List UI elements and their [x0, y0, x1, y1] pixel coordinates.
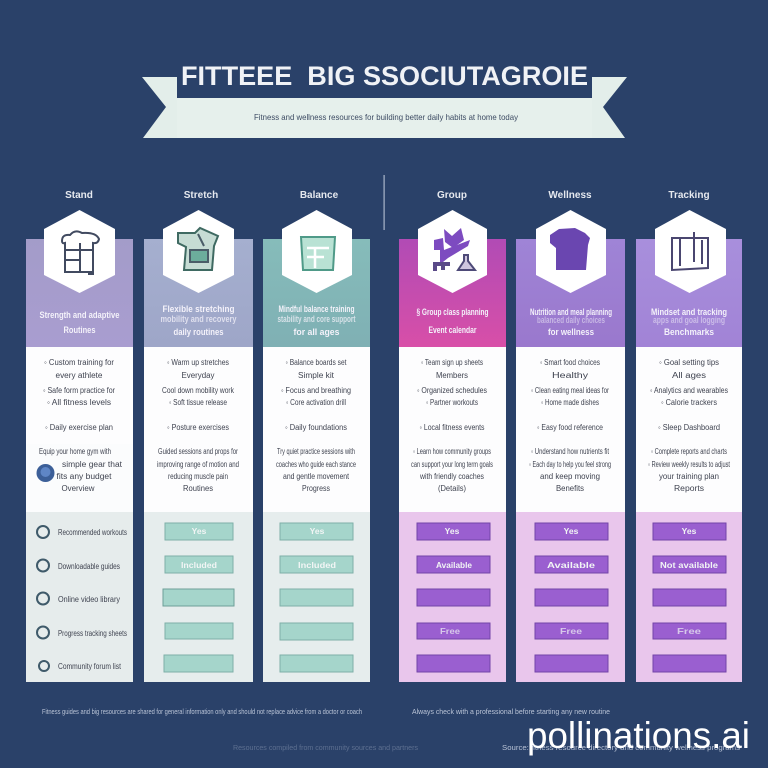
list text: ◦ All fitness levels [47, 398, 111, 407]
resource bars: Yes [310, 526, 325, 536]
resource bars: Free [440, 626, 460, 636]
list text: ◦ Calorie trackers [661, 398, 717, 407]
paragraph [529, 447, 611, 493]
paragraph [276, 447, 356, 493]
paragraph: (Details) [438, 484, 466, 493]
icon: hexagon outline chart [655, 210, 726, 293]
paragraph: can support your long term goals [411, 460, 493, 469]
list text: ◦ Posture exercises [167, 423, 229, 432]
header text: Flexible stretching [162, 304, 234, 314]
resource bars: Not available [660, 560, 718, 570]
resource rows: Progress tracking sheets [58, 629, 127, 638]
paragraph: coaches who guide each stance [276, 460, 356, 469]
list text: ◦ Safe form practice for [43, 386, 115, 395]
panel: column 6 [636, 210, 742, 682]
paragraph with badge: simple gear that [62, 460, 123, 469]
panel: column 4 [399, 210, 506, 682]
panel: column 5 [516, 210, 625, 682]
paragraph: ◦ Complete reports and charts [651, 447, 727, 456]
resource bars: Included [298, 560, 336, 570]
list text: ◦ Organized schedules [417, 386, 487, 395]
list text: Healthy [552, 371, 588, 380]
paragraph [648, 447, 731, 493]
resource rows: Online video library [58, 595, 120, 604]
center divider [384, 175, 385, 230]
paragraph: Try quiet practice sessions with [277, 447, 355, 456]
list text: Simple kit [298, 371, 335, 380]
list text: every athlete [56, 371, 103, 380]
list text: ◦ Home made dishes [541, 398, 599, 407]
paragraph with badge: fits any budget [56, 472, 112, 481]
list text: ◦ Daily foundations [285, 423, 347, 432]
resource rows: Community forum list [58, 662, 122, 671]
watermark: pollinations.ai [527, 715, 750, 756]
panel: column 1 [26, 210, 133, 682]
paragraph: Benefits [556, 484, 584, 493]
list text [531, 358, 609, 432]
resource bars [653, 523, 726, 672]
paragraph: ◦ Each day to help you feel strong [529, 460, 611, 469]
list text: ◦ Sleep Dashboard [658, 423, 720, 432]
resource bars: Yes [445, 526, 460, 536]
paragraph: reducing muscle pain [168, 472, 228, 481]
paragraph: and keep moving [540, 472, 600, 481]
resource bars: Yes [192, 526, 207, 536]
footer source: Source: fitness resource directory and community wellness programs [502, 743, 740, 752]
header text: Mindful balance training [278, 304, 354, 314]
icon: hexagon kitchen [44, 210, 115, 293]
paragraph: improving range of motion and [157, 460, 239, 469]
resource bars [280, 523, 353, 672]
list text: ◦ Core activation drill [286, 398, 346, 407]
header text: Routines [64, 325, 96, 335]
header text: balanced daily choices [537, 315, 605, 325]
resource bars: Yes [564, 526, 579, 536]
list text: ◦ Focus and breathing [281, 386, 351, 395]
panel: column 3 [263, 210, 370, 682]
resource bars: Free [560, 626, 582, 636]
header text: § Group class planning [416, 307, 488, 317]
paragraph: ◦ Review weekly results to adjust [648, 460, 731, 469]
icon: hexagon purple silhouette [536, 210, 606, 293]
header text [278, 304, 356, 337]
paragraph: Guided sessions and props for [158, 447, 238, 456]
header text: mobility and recovery [160, 314, 236, 324]
header text [416, 307, 488, 335]
list text: All ages [672, 371, 706, 380]
list text: ◦ Smart food choices [540, 358, 600, 367]
title: FITTEEE BIG SSOCIUTAGROIE [181, 61, 588, 91]
subtitle: Fitness and wellness resources for building better daily habits at home today [254, 112, 519, 122]
list text: ◦ Easy food reference [537, 423, 603, 432]
panel: column 2 [144, 210, 253, 682]
list text: Everyday [182, 371, 214, 380]
paragraph: and gentle movement [283, 472, 350, 481]
resource bars: Yes [682, 526, 697, 536]
column label: 2: Stretch [184, 190, 218, 201]
list text [162, 358, 235, 432]
paragraph: ◦ Learn how community groups [413, 447, 491, 456]
resource bars [417, 523, 490, 672]
resource bars [163, 523, 234, 672]
list text: ◦ Clean eating meal ideas for [531, 386, 609, 395]
column label: 3: Balance [300, 190, 339, 201]
footer note: right: Always check with a professional before starting any new routine [412, 707, 610, 716]
resource bars: Included [181, 560, 217, 570]
list text [281, 358, 351, 432]
list text [650, 358, 728, 432]
resource rows [37, 526, 127, 671]
column label: 5: Wellness [548, 190, 592, 201]
paragraph: Progress [302, 484, 330, 493]
list text: ◦ Balance boards set [286, 358, 347, 367]
header text: for all ages [294, 327, 340, 337]
column label: 1: Stand [65, 190, 93, 201]
header text: apps and goal logging [653, 315, 725, 325]
list text [417, 358, 487, 432]
paragraph [411, 447, 493, 493]
header text: Event calendar [428, 325, 477, 335]
list text: ◦ Soft tissue release [169, 398, 227, 407]
list text: ◦ Goal setting tips [659, 358, 719, 367]
list text: ◦ Partner workouts [426, 398, 478, 407]
paragraph with badge: Equip your home gym with [39, 447, 111, 456]
icon: hexagon flask and plant [418, 210, 487, 293]
column label: 4: Group [437, 190, 467, 201]
title ribbon [142, 64, 627, 138]
header text: for wellness [548, 327, 594, 337]
footer note: left: Fitness guides and big resources are shared for general information only and should not replace advice from a doctor or coach [42, 707, 362, 716]
resource bars: Available [547, 560, 595, 570]
icon: hexagon checklist [282, 210, 352, 293]
header text [160, 304, 236, 337]
paragraph [157, 447, 239, 493]
resource rows: Recommended workouts [58, 528, 127, 537]
header text: stability and core support [278, 314, 356, 324]
header text: daily routines [174, 327, 224, 337]
resource bars [535, 523, 608, 672]
paragraph: your training plan [659, 472, 719, 481]
paragraph: Reports [674, 484, 704, 493]
header text [651, 307, 727, 337]
resource rows: Downloadable guides [58, 562, 120, 571]
footer credits: Resources compiled from community sources and partners [233, 743, 418, 752]
list text: ◦ Team sign up sheets [421, 358, 483, 367]
list text: ◦ Local fitness events [420, 423, 484, 432]
paragraph: Routines [183, 484, 213, 493]
list text: ◦ Warm up stretches [167, 358, 229, 367]
list text: ◦ Analytics and wearables [650, 386, 728, 395]
header text: Strength and adaptive [40, 310, 120, 320]
list text: Members [436, 371, 468, 380]
paragraph: with friendly coaches [419, 472, 484, 481]
paragraph with badge: Overview [62, 484, 95, 493]
list text: Cool down mobility work [162, 386, 235, 395]
icon: hexagon dumbbell rack [163, 210, 234, 293]
header text: Nutrition and meal planning [530, 307, 612, 317]
paragraph: ◦ Understand how nutrients fit [531, 447, 610, 456]
header text [530, 307, 612, 337]
list text: ◦ Daily exercise plan [45, 423, 113, 432]
resource bars: Available [436, 560, 472, 570]
list text [43, 358, 115, 432]
column label: 6: Tracking [668, 190, 710, 201]
header text: Mindset and tracking [651, 307, 727, 317]
header text [40, 310, 120, 335]
paragraph with badge [36, 447, 123, 493]
list text: ◦ Custom training for [44, 358, 114, 367]
header text: Benchmarks [664, 327, 714, 337]
resource bars: Free [677, 626, 701, 636]
